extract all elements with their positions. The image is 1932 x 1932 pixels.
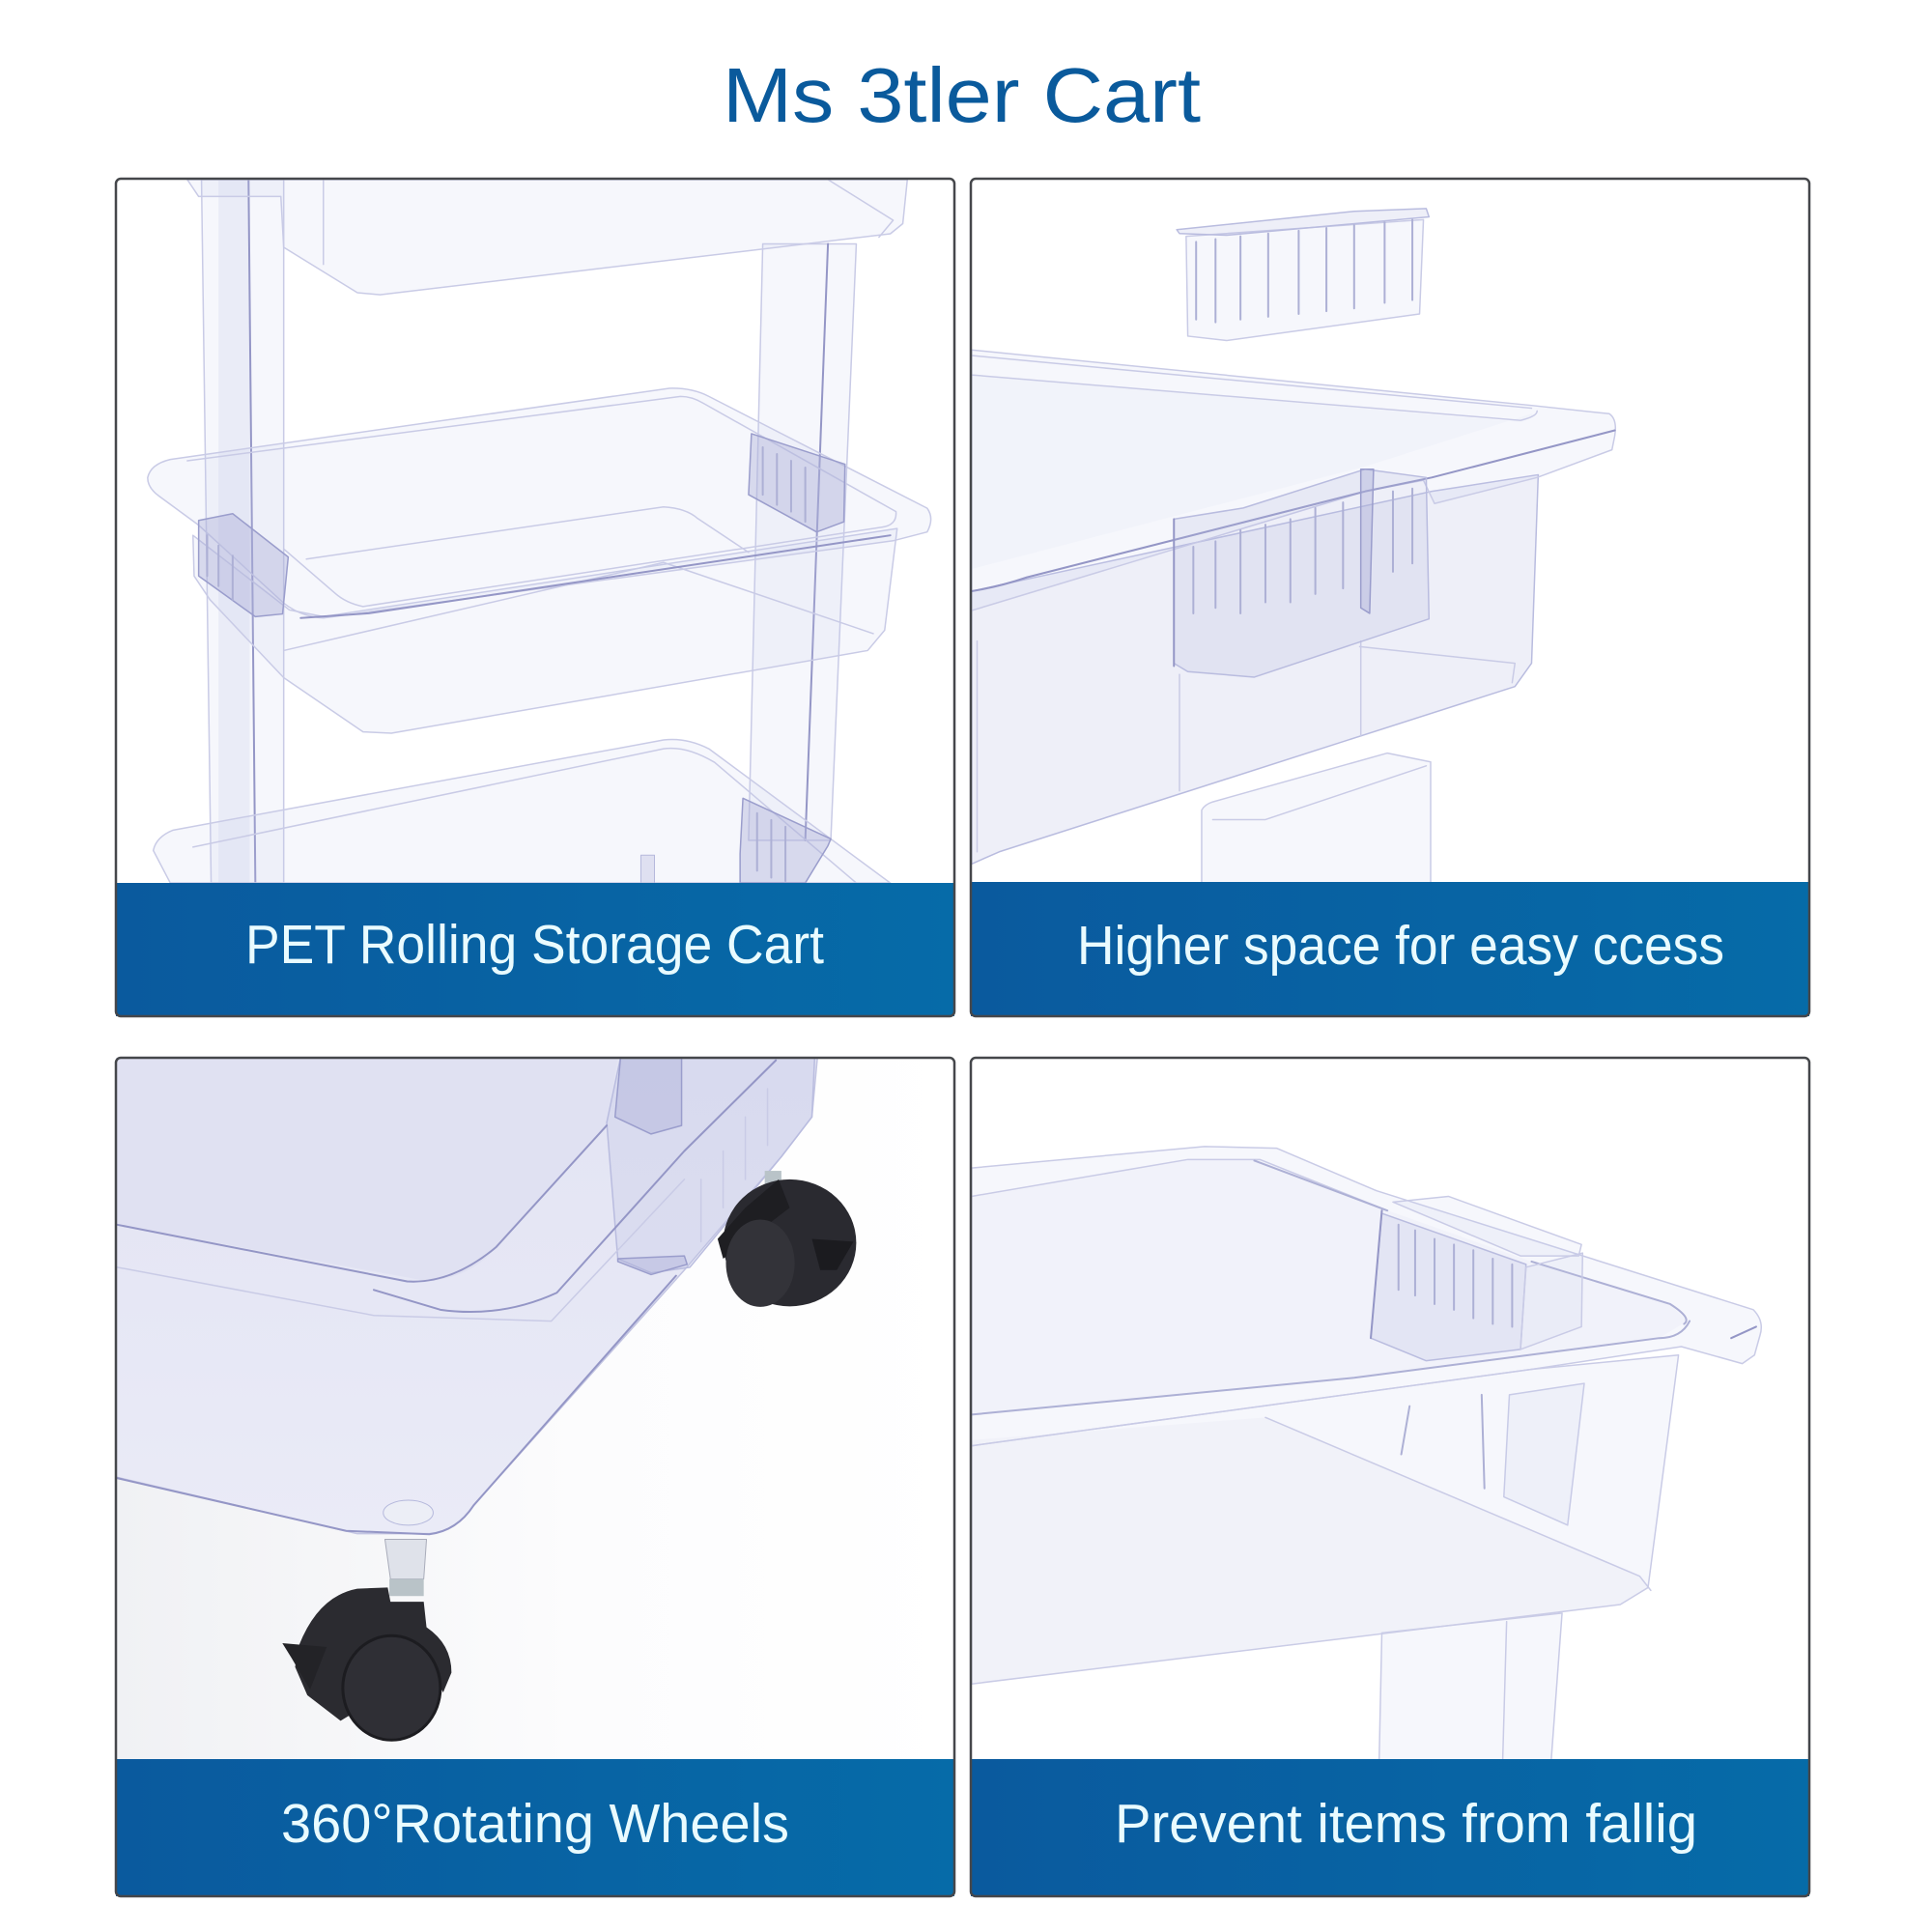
- caption bar: [971, 1759, 1809, 1896]
- post below basket: [1202, 753, 1431, 885]
- photo: cart with three shelves: [148, 180, 931, 883]
- detached clip top: [1177, 209, 1429, 341]
- panel frames: [116, 179, 1809, 1896]
- icon: back wheel: [718, 1171, 856, 1307]
- caption bar: Higher space for easy ccess: [1077, 915, 1724, 977]
- photo: basket corner with clip: [972, 1147, 1761, 1763]
- photo: basket corner with separate clip and post: [972, 209, 1615, 885]
- caption bar: Prevent items from fallig: [1115, 1793, 1697, 1855]
- icon: front wheel: [282, 1500, 451, 1740]
- photo: bottom shelf and wheels: [116, 1058, 856, 1759]
- caption bar: [116, 883, 954, 1016]
- panel: rotating wheels: [116, 1058, 956, 1896]
- caption bar: [971, 882, 1809, 1016]
- caption bar: PET Rolling Storage Cart: [245, 914, 824, 976]
- clip inserted on rim: [1174, 469, 1429, 677]
- panel: higher space: [971, 209, 1809, 1016]
- clip on rear rim: [1371, 1196, 1582, 1361]
- panel: prevent items falling: [971, 1147, 1809, 1896]
- title: Ms 3tler Cart: [723, 52, 1201, 138]
- panel: PET rolling storage cart: [116, 180, 954, 1016]
- caption bar: [116, 1759, 954, 1896]
- caption bar: 360°Rotating Wheels: [281, 1793, 789, 1855]
